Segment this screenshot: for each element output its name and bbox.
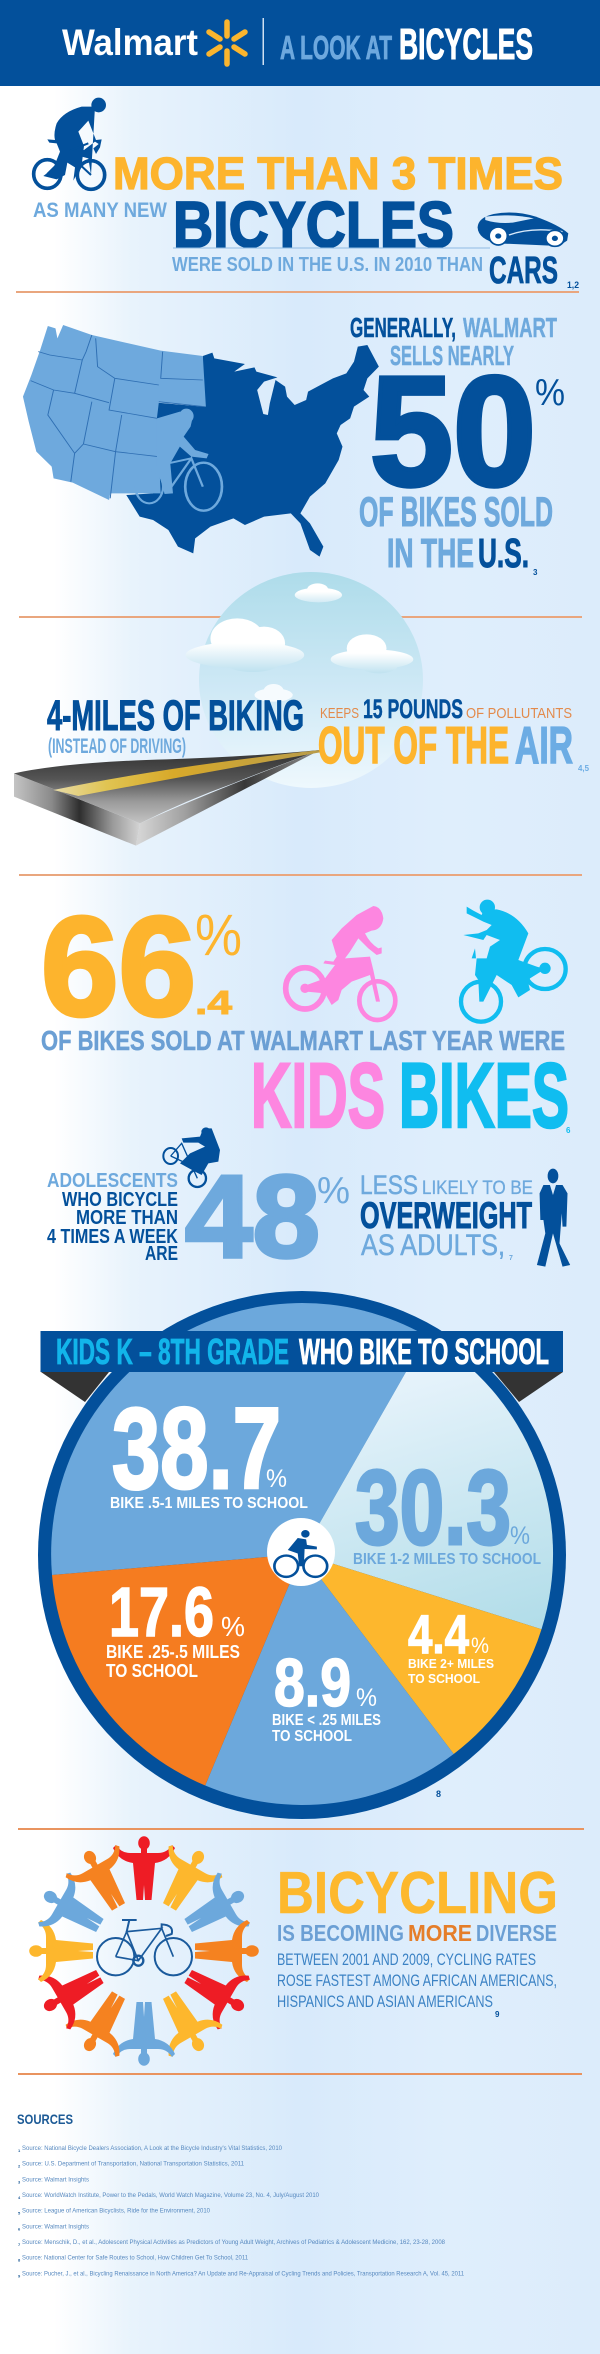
banner tails bbox=[41, 1372, 563, 1402]
panel: more bicycles than cars bbox=[33, 98, 579, 292]
text: is becoming more diverse: DIVERSE bbox=[476, 1920, 557, 1946]
footnote: 8 bbox=[436, 1789, 441, 1799]
banner title: KIDS K – 8TH GRADE bbox=[56, 1331, 289, 1372]
source numbers: 5 bbox=[18, 2211, 21, 2216]
chart: pie bbox=[51, 1303, 553, 1805]
text: adolescents who bicycle: ADOLESCENTS bbox=[47, 1170, 178, 1192]
stat: 66.4 percent: .4 bbox=[195, 984, 233, 1021]
stat: 4.4 percent bbox=[408, 1603, 494, 1686]
text: less likely to be overweight bbox=[360, 1170, 533, 1262]
source list: Source: League of American Bicyclists, Ride for the Environment, 2010 bbox=[22, 2209, 211, 2215]
icon: car bbox=[478, 212, 568, 246]
source list: Source: Menschik, D., et al., Adolescent Physical Activities as Predictors of Young Adult Weight, Archives of Pediatrics & Adolescent Medicine, 162, 23-28, 2008 bbox=[22, 2240, 446, 2246]
text: as many new: AS MANY NEW bbox=[33, 199, 167, 222]
source list: Source: Walmart Insights bbox=[22, 2177, 89, 2183]
stat: 66.4 percent: % bbox=[195, 903, 242, 968]
stat: 30.3 percent: % bbox=[510, 1522, 530, 1550]
footnote: 1,2 bbox=[567, 280, 579, 290]
icon: small wheelie rider bbox=[163, 1127, 220, 1187]
stat: 17.6 percent: % bbox=[221, 1611, 245, 1642]
text: adolescents who bicycle: 4 TIMES A WEEK bbox=[47, 1226, 178, 1248]
Walmart wordmark: Walmart bbox=[62, 22, 198, 63]
icon: Walmart spark bbox=[209, 22, 245, 64]
heading: bicycling: BICYCLING bbox=[277, 1860, 558, 1926]
text: is becoming more diverse: MORE bbox=[408, 1920, 472, 1946]
icon: man in suit bbox=[537, 1169, 570, 1267]
header title bbox=[280, 20, 533, 69]
source list: Source: Walmart Insights bbox=[22, 2224, 89, 2230]
sky circle bbox=[199, 572, 423, 788]
text: of bikes sold in the U.S.: IN THE bbox=[387, 530, 474, 576]
text: less likely to be overweight: 7 bbox=[509, 1255, 513, 1262]
source numbers: 2 bbox=[18, 2164, 21, 2169]
source numbers: 4 bbox=[18, 2195, 21, 2200]
stat: 30.3 percent: 30.3 bbox=[355, 1449, 511, 1567]
heading: more than 3 times: MORE THAN 3 TIMES bbox=[113, 148, 563, 199]
heading: out of the air: 4,5 bbox=[578, 763, 589, 773]
text: cycling rates bbox=[277, 1950, 557, 2019]
text: is becoming more diverse bbox=[277, 1920, 557, 1946]
icon: cyclist overlay bbox=[135, 409, 222, 511]
text: less likely to be overweight: LESS bbox=[360, 1170, 418, 1200]
stat: 66.4 percent: 66 bbox=[41, 887, 196, 1045]
text: keeps 15 pounds of pollutants: KEEPS bbox=[320, 705, 359, 722]
source numbers: 1 bbox=[18, 2148, 21, 2153]
header title: A LOOK AT bbox=[280, 29, 392, 66]
heading: kids bikes: 6 bbox=[566, 1126, 571, 1135]
stat: 8.9 percent: TO SCHOOL bbox=[272, 1728, 352, 1745]
stat: 4.4 percent: % bbox=[471, 1633, 489, 1658]
icon: clouds bbox=[186, 583, 413, 702]
source numbers: 8 bbox=[18, 2258, 21, 2263]
text: of bikes sold in the U.S.: 3 bbox=[533, 568, 538, 577]
stat: 38.7 percent: BIKE .5-1 MILES TO SCHOOL bbox=[110, 1495, 308, 1512]
stat: 8.9 percent: % bbox=[356, 1684, 377, 1712]
source numbers: 7 bbox=[18, 2242, 21, 2247]
text: generally Walmart sells nearly bbox=[350, 312, 557, 371]
heading: kids bikes bbox=[251, 1045, 571, 1147]
panel: Walmart share of US bike sales bbox=[23, 312, 565, 577]
source numbers bbox=[18, 2148, 21, 2278]
source numbers: 6 bbox=[18, 2226, 21, 2231]
stat: 17.6 percent: 17.6 bbox=[109, 1573, 214, 1651]
source numbers: 3 bbox=[18, 2179, 21, 2184]
stat: 4.4 percent: 4.4 bbox=[408, 1603, 469, 1665]
stat: 17.6 percent: BIKE .25-.5 MILES bbox=[106, 1642, 240, 1662]
icon: pink rider bbox=[286, 906, 395, 1020]
text: keeps 15 pounds of pollutants: 15 POUNDS bbox=[363, 694, 463, 724]
text: of bikes sold in the U.S.: U.S. bbox=[478, 530, 529, 576]
stat: 4.4 percent: BIKE 2+ MILES bbox=[408, 1656, 494, 1671]
panel: kids bikes bbox=[41, 887, 571, 1282]
text: keeps 15 pounds of pollutants bbox=[320, 694, 572, 724]
source list: Source: National Bicycle Dealers Association, A Look at the Bicycle Industry's Vital Statistics, 2010 bbox=[22, 2146, 283, 2152]
source list: Source: U.S. Department of Transportation, National Transportation Statistics, 2011 bbox=[22, 2162, 245, 2168]
text: cycling rates: 9 bbox=[495, 2010, 500, 2019]
text: keeps 15 pounds of pollutants: OF POLLUTANTS bbox=[466, 705, 572, 722]
stat: 38.7 percent: % bbox=[266, 1465, 287, 1493]
stat: 50 percent: 50 bbox=[370, 345, 536, 519]
stat: 30.3 percent: BIKE 1-2 MILES TO SCHOOL bbox=[353, 1551, 541, 1568]
icon: blue rider bbox=[461, 900, 566, 1022]
text: 4 miles of biking: (INSTEAD OF DRIVING) bbox=[48, 735, 186, 758]
text: cycling rates: HISPANICS AND ASIAN AMERICANS bbox=[277, 1992, 493, 2011]
stat: 50 percent: % bbox=[535, 372, 565, 414]
text: were sold in the U.S.: WERE SOLD IN THE U.S. IN 2010 THAN bbox=[172, 254, 483, 276]
stat: 4.4 percent: TO SCHOOL bbox=[408, 1671, 480, 1686]
text: less likely to be overweight: LIKELY TO BE bbox=[422, 1178, 533, 1199]
text: is becoming more diverse: IS BECOMING bbox=[277, 1920, 404, 1946]
source list: Source: National Center for Safe Routes to School, How Children Get To School, 2011 bbox=[22, 2256, 249, 2262]
heading: kids bikes: KIDS bbox=[251, 1045, 385, 1147]
text: adolescents who bicycle: WHO BICYCLE bbox=[62, 1189, 178, 1211]
panel: pollution saved by biking bbox=[14, 572, 589, 846]
icon: center cyclist bbox=[267, 1518, 335, 1586]
stat: 8.9 percent bbox=[272, 1645, 381, 1745]
stat: 48 percent: 48 bbox=[185, 1151, 320, 1282]
heading: sources: SOURCES bbox=[17, 2111, 73, 2127]
stat: 17.6 percent: TO SCHOOL bbox=[106, 1661, 198, 1681]
text: adolescents who bicycle: MORE THAN bbox=[76, 1207, 178, 1229]
panel: kids who bike to school bbox=[38, 1291, 566, 1819]
source list: Source: Pucher, J., et al., Bicycling Renaissance in North America? An Update and Re-Appraisal of Cycling Trends and Policies, Transportation Research A, Vol. 45, 2011 bbox=[22, 2271, 465, 2277]
stat: 8.9 percent: 8.9 bbox=[274, 1645, 351, 1721]
chart: US map bbox=[23, 325, 379, 557]
source list: Source: WorldWatch Institute, Power to the Pedals, World Watch Magazine, Volume 23, No. 4, July/August 2010 bbox=[22, 2193, 320, 2199]
text: 4 miles of biking bbox=[47, 692, 304, 758]
icon: cyclist bbox=[34, 98, 106, 189]
panel: bicycling diversity bbox=[29, 1836, 558, 2066]
icon: road bbox=[14, 750, 320, 846]
text: 4 miles of biking: 4-MILES OF BIKING bbox=[47, 692, 304, 740]
text: generally Walmart sells nearly: SELLS NEARLY bbox=[390, 340, 514, 371]
stat: 48 percent: % bbox=[317, 1170, 350, 1212]
source numbers: 9 bbox=[18, 2273, 21, 2278]
heading: cars: CARS bbox=[489, 250, 558, 292]
text: generally Walmart sells nearly: GENERALLY, bbox=[350, 312, 456, 343]
icon: ring of people bbox=[29, 1836, 259, 2066]
icon: road bicycle bbox=[97, 1920, 192, 1975]
panel: sources bbox=[17, 2111, 465, 2278]
header banner bbox=[0, 0, 600, 86]
stat: 8.9 percent: BIKE < .25 MILES bbox=[272, 1712, 381, 1729]
text: less likely to be overweight: AS ADULTS, bbox=[361, 1229, 505, 1262]
stat: 38.7 percent: 38.7 bbox=[112, 1385, 281, 1513]
source list bbox=[22, 2146, 465, 2277]
text: of bikes sold in the U.S. bbox=[359, 488, 553, 577]
text: adolescents who bicycle bbox=[47, 1170, 178, 1265]
text: adolescents who bicycle: ARE bbox=[145, 1243, 178, 1265]
heading: bicycles: BICYCLES bbox=[173, 188, 454, 261]
